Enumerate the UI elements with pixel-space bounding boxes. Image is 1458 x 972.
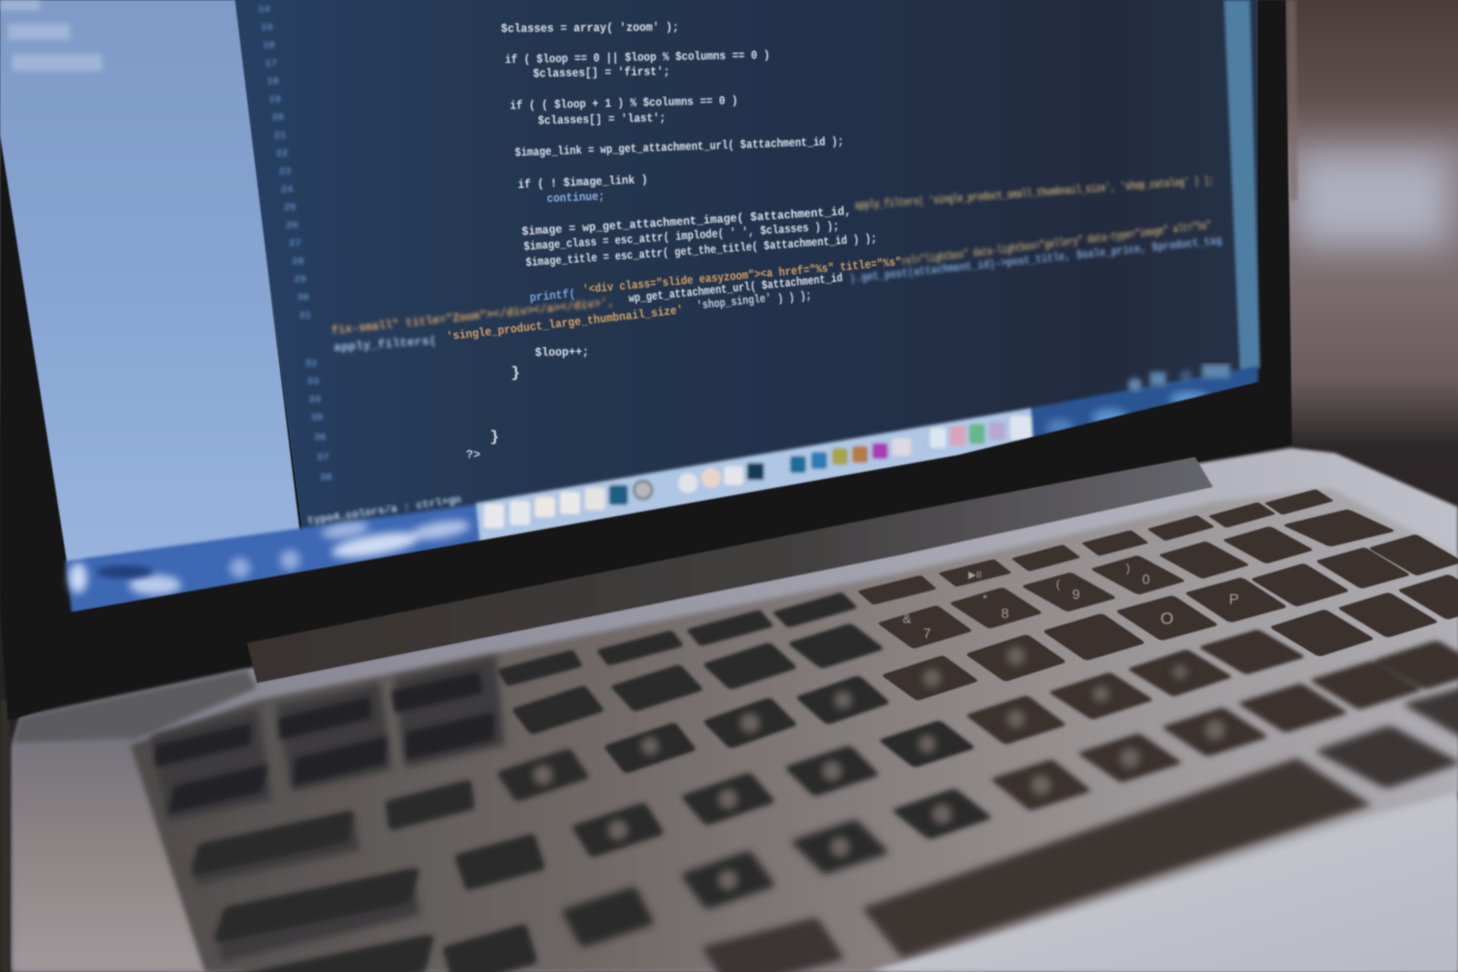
base left upper panel: [12, 670, 257, 745]
sidebar blurred labels: [0, 0, 102, 71]
code text: if ( $loop == 0 || $loop % $columns == 0 ): [505, 48, 770, 67]
line numbers: 18: [267, 77, 279, 88]
code text: $image_class = esc_attr( implode( ' ', $classes ) );: [523, 219, 840, 254]
spacebar: [862, 758, 1372, 958]
key legends: blurred glows: [533, 647, 1225, 890]
right key legends: [903, 561, 1256, 662]
code text far blurred lines: [331, 173, 1222, 355]
screen: editor window: [232, 0, 1258, 530]
line numbers: 22: [276, 149, 288, 160]
screen: wallpaper strip: [65, 366, 1258, 614]
code text: $classes[] = 'first';: [533, 65, 670, 81]
line numbers: 16: [263, 41, 275, 52]
code text far blurred lines: apply_filters( 'single_product_small_thumbnail_size', 'shop_catalog' ) );: [854, 173, 1214, 213]
code text far blurred lines: rel="lightbox" data-lightbox="gallery" data-type="image" alt="%s": [901, 218, 1212, 269]
code text: [446, 20, 902, 462]
code text: $loop++;: [535, 345, 589, 360]
line numbers: 38: [320, 473, 332, 484]
right key legends: &: [903, 611, 912, 626]
line numbers: 31: [299, 311, 311, 322]
code text far blurred lines: fix-small" title="Zoom"></div></a></div>',: [331, 295, 615, 338]
code text far blurred lines: ).get_post(attachment_id)->post_title, $sale_price, $product_tag: [849, 234, 1222, 286]
line numbers: 19: [269, 95, 281, 106]
code text: ?>: [466, 448, 480, 462]
right key legends: 8: [1001, 605, 1009, 621]
code text: }: [511, 365, 520, 382]
right key legends: L: [1248, 646, 1256, 662]
dock: [476, 408, 1034, 545]
line numbers: 36: [314, 433, 326, 444]
line numbers: 17: [265, 59, 277, 70]
status bar: typo4.colors/a : ctrl+gn: [307, 495, 462, 528]
code text: 'single_product_large_thumbnail_size': [446, 303, 684, 344]
code text: continue;: [547, 189, 605, 206]
status icons right: [1128, 364, 1230, 392]
right top keyboard rows: sharp keys: [857, 489, 1458, 701]
line numbers: 30: [297, 293, 309, 304]
line numbers: 34: [309, 395, 321, 406]
line numbers: 24: [281, 185, 293, 196]
laptop lid bezel: [0, 0, 1292, 720]
code text: }: [490, 429, 499, 446]
wallpaper clouds: [69, 517, 471, 595]
code text: '<div class="slide easyzoom"><a href="%s" title="%s": [582, 255, 902, 297]
line numbers: [258, 5, 332, 484]
keyboard well: [130, 488, 1458, 972]
right key legends: ▶II: [968, 570, 982, 581]
line numbers: 33: [307, 377, 319, 388]
line numbers: 15: [261, 23, 273, 34]
line numbers: 32: [305, 359, 317, 370]
right key legends: 7: [923, 625, 931, 641]
laptop base body: [12, 448, 1458, 972]
right key legends: ): [1126, 561, 1130, 575]
code text: printf(: [529, 287, 576, 305]
code text: $classes = array( 'zoom' );: [501, 20, 679, 36]
middle keyboard row: left keys blurred: [571, 640, 1458, 858]
line numbers: 23: [279, 167, 291, 178]
line numbers: 37: [317, 453, 329, 464]
right key legends: 0: [1142, 571, 1150, 587]
code text: $image_link = wp_get_attachment_url( $attachment_id );: [515, 135, 844, 160]
code text: ) ) );: [777, 289, 812, 306]
dock icons: [484, 416, 1032, 528]
code text: if ( ! $image_link ): [518, 173, 648, 192]
line numbers: 29: [294, 275, 306, 286]
base left strip: [12, 738, 210, 972]
screen: right scrollbar strip: [1224, 0, 1260, 372]
line numbers: 20: [272, 113, 284, 124]
right key legends: 9: [1072, 586, 1080, 602]
line numbers: 14: [258, 5, 270, 16]
code text: if ( ( $loop + 1 ) % $columns == 0 ): [510, 94, 738, 113]
code text far blurred lines: apply_filters(: [333, 334, 437, 355]
code text: $classes[] = 'last';: [538, 111, 666, 128]
bezel lower black band: [0, 382, 1286, 720]
code text: $image = wp_get_attachment_image( $attachment_id,: [521, 204, 852, 239]
code text: wp_get_attachment_url( $attachment_id: [628, 271, 843, 306]
right key legends: O: [1160, 609, 1174, 628]
line numbers: 21: [274, 131, 286, 142]
screen: file sidebar: [0, 0, 300, 563]
left far keyboard rows: keys blurred: [155, 671, 590, 972]
front keyboard rows: heavily blurred keys: [561, 684, 1458, 972]
hinge: [247, 457, 1213, 683]
left key block backing: [150, 655, 505, 962]
line numbers: 35: [311, 413, 323, 424]
bottom left shadow: [0, 700, 10, 972]
lid edge right: [1286, 0, 1298, 200]
right wallpaper lights: [1046, 391, 1210, 437]
line numbers: 25: [284, 203, 296, 214]
middle keyboard row: keys: [878, 629, 1306, 768]
line numbers: 28: [292, 257, 304, 268]
right key legends: P: [1229, 591, 1239, 608]
right key legends: (: [1056, 577, 1060, 591]
code text: $image_title = esc_attr( get_the_title( $attachment_id ) );: [525, 231, 877, 270]
line numbers: 27: [289, 239, 301, 250]
wallpaper dark patch: [97, 565, 153, 579]
right key legends: *: [983, 592, 988, 606]
left upper keyboard rows: keys: [497, 592, 891, 774]
line numbers: 26: [286, 221, 298, 232]
code text: 'shop_single': [696, 291, 772, 313]
front palm rest: [870, 798, 1458, 972]
